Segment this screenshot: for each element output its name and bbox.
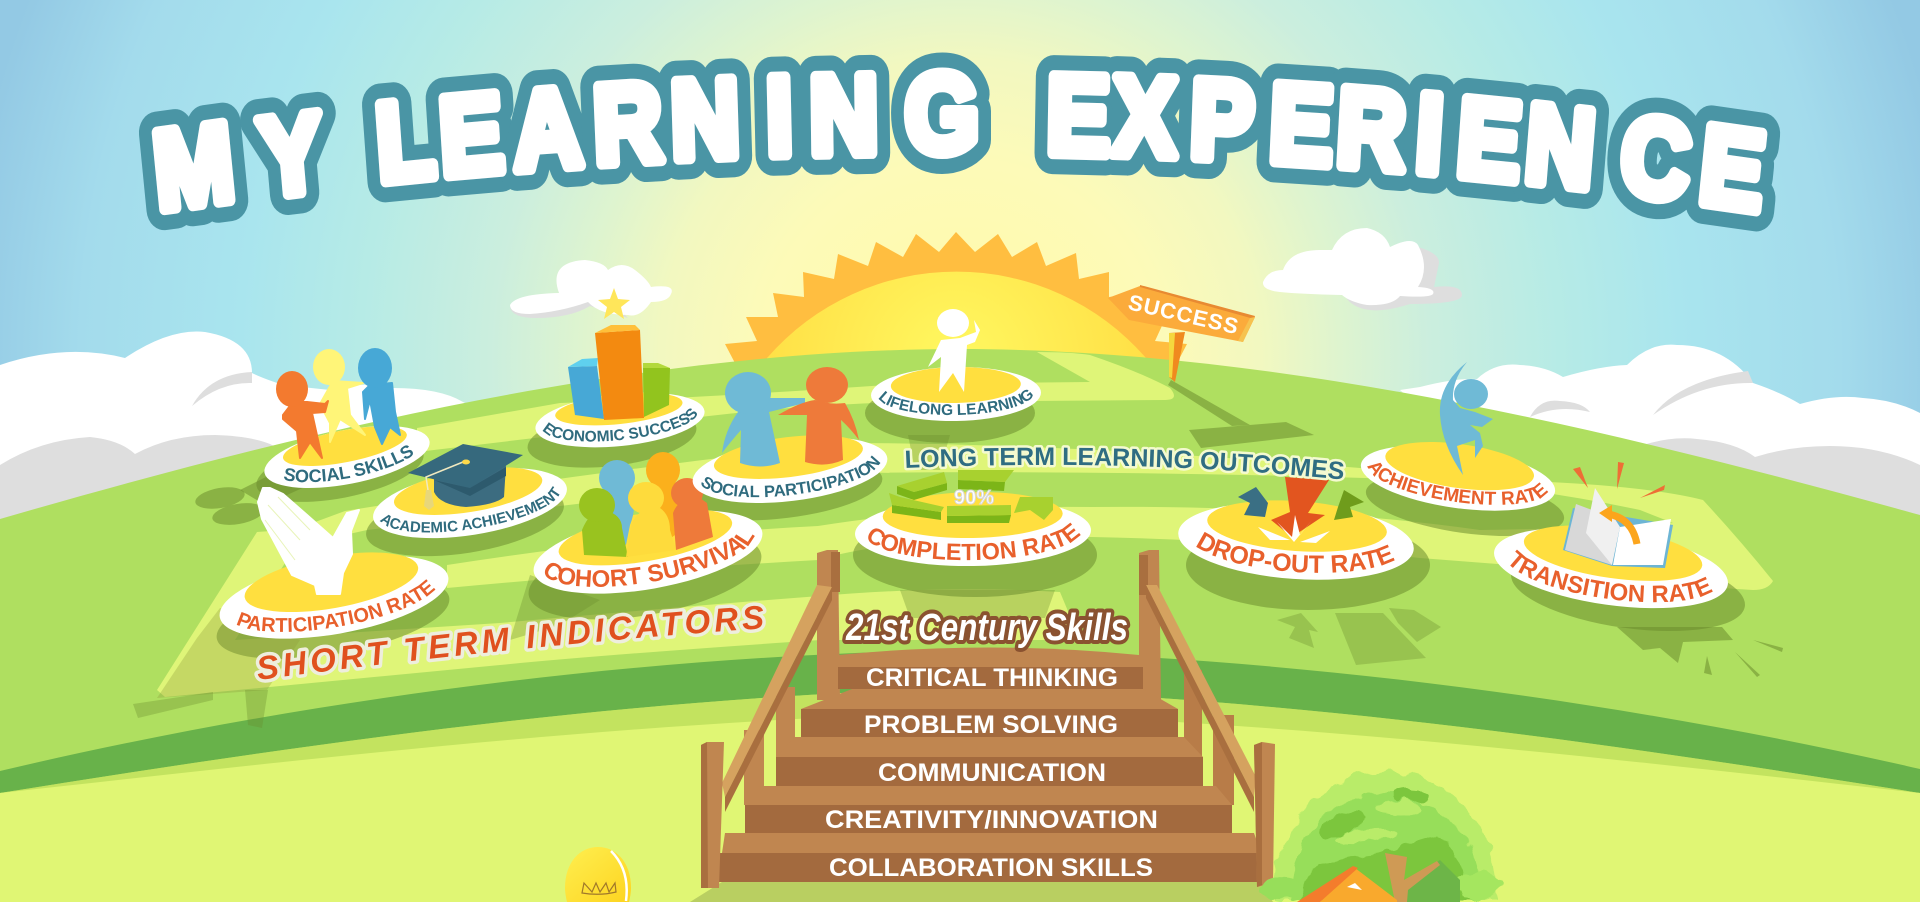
- icon: graduation cap: [408, 444, 523, 510]
- cloud: big left: [0, 332, 520, 560]
- disc: drop-out rate: [1178, 477, 1414, 580]
- hill: lower stripe: [0, 688, 1920, 820]
- icon: open book with arrow: [1563, 462, 1673, 568]
- heading: 21st century skills: 21st Century Skills: [845, 607, 1128, 649]
- disc: social participation: [692, 367, 888, 503]
- disc: completion rate: [855, 470, 1091, 566]
- sign: success: SUCCESS: [1126, 290, 1241, 339]
- icon: falling arrows: [1238, 477, 1364, 543]
- icon: bar chart with star: [568, 288, 670, 420]
- icon: three friends: [276, 348, 400, 458]
- hill: dark green band: [0, 650, 1920, 793]
- icon: progress ring: 90%: [954, 487, 994, 509]
- icon: group of people: [579, 452, 713, 557]
- step: collaboration skills: COLLABORATION SKILLS: [829, 854, 1153, 882]
- disc: academic achievement: ACADEMIC ACHIEVEMENT: [380, 486, 560, 532]
- title: MY LEARNING EXPERIENCE: [148, 52, 1770, 236]
- icon: progress ring: [889, 470, 1053, 523]
- icon: white person: [928, 309, 980, 392]
- disc: achievement rate: ACHIEVEMENT RATE: [1367, 462, 1548, 505]
- disc: cohort survival: [534, 452, 762, 594]
- step top landing: [838, 648, 1139, 667]
- step: problem solving: [801, 709, 1178, 739]
- disc: transition rate: TRANSITION RATE: [1510, 550, 1713, 602]
- disc: lifelong learning: LIFELONG LEARNING: [878, 390, 1033, 416]
- stairs: [701, 550, 1275, 888]
- heading: short term indicators: SHORT TERM INDICATORS: [254, 602, 766, 683]
- cloud: small left: [510, 260, 672, 318]
- cast shadows on the hill: [133, 380, 1783, 728]
- path below stairs: [690, 882, 1273, 902]
- disc: social participation: SOCIAL PARTICIPATION: [701, 456, 880, 498]
- step: problem solving: PROBLEM SOLVING: [864, 711, 1118, 739]
- title: MY LEARNING EXPERIENCE: [148, 52, 1770, 236]
- railing: front posts and rails: [701, 585, 1275, 888]
- icon: jumping person: [1440, 362, 1493, 475]
- foreground lawn: [0, 712, 1920, 902]
- icon: light bulb: [565, 847, 631, 902]
- step: creativity/innovation: CREATIVITY/INNOVATION: [825, 806, 1158, 834]
- step: communication: COMMUNICATION: [878, 759, 1106, 787]
- disc: participation rate: [220, 487, 448, 639]
- step: communication: [776, 757, 1203, 787]
- railing: back posts: [744, 550, 1234, 805]
- step: collaboration skills: [717, 853, 1261, 882]
- disc: social skills: SOCIAL SKILLS: [284, 445, 413, 482]
- disc: completion rate: COMPLETION RATE: [868, 522, 1081, 560]
- sign: success: [1108, 285, 1255, 382]
- sun: [725, 232, 1187, 370]
- heading: long term learning outcomes: LONG TERM LEARNING OUTCOMES: [903, 445, 1346, 482]
- disc: drop-out rate: DROP-OUT RATE: [1196, 532, 1395, 573]
- disc: economic success: ECONOMIC SUCCESS: [542, 408, 697, 442]
- step: creativity/innovation: [745, 805, 1232, 834]
- icon: raised hand: [258, 488, 359, 594]
- disc: lifelong learning: [871, 309, 1041, 421]
- disc: transition rate: [1494, 462, 1728, 608]
- disc: cohort survival: COHORT SURVIVAL: [544, 534, 755, 587]
- disc: achievement rate: [1360, 362, 1556, 511]
- cloud: small right: [1263, 228, 1462, 310]
- disc: economic success: [535, 288, 705, 448]
- cloud: big right: [1400, 345, 1920, 560]
- disc: social skills: [264, 348, 430, 488]
- icon: two friends: [722, 367, 859, 466]
- disc: participation rate: PARTICIPATION RATE: [236, 579, 436, 632]
- icon: tree and house: [1258, 772, 1502, 902]
- disc: academic achievement: [373, 444, 567, 538]
- winding road: [157, 352, 1773, 697]
- green hill: [0, 349, 1920, 902]
- step: critical thinking: CRITICAL THINKING: [866, 664, 1118, 692]
